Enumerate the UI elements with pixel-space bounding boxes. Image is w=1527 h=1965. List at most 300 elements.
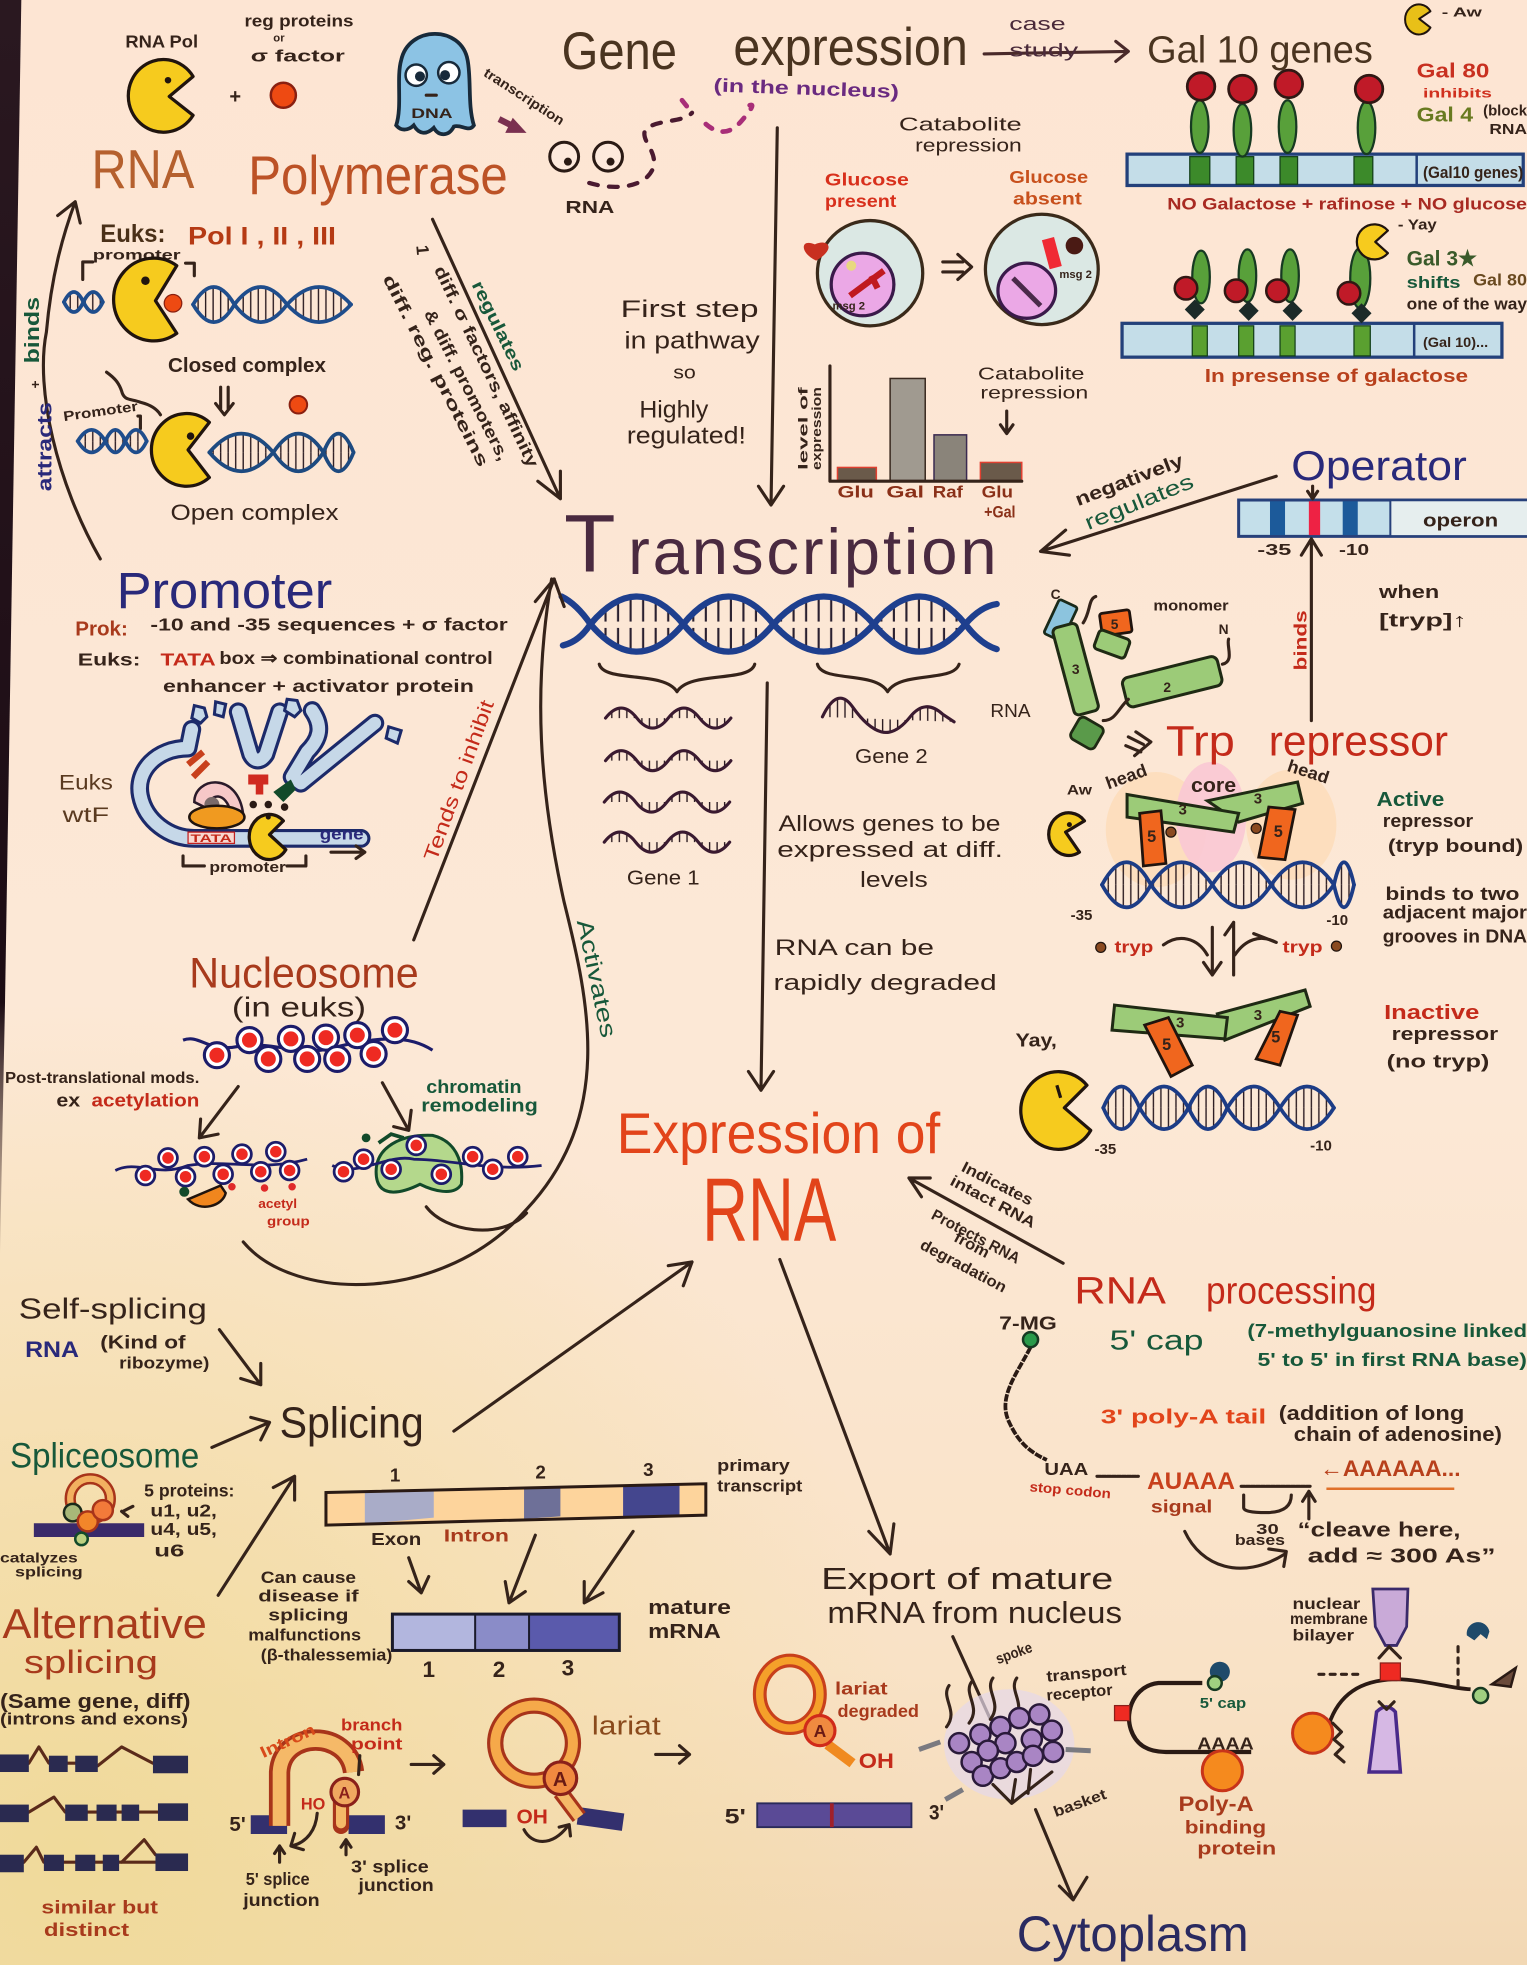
heading: Trp repressor [1166, 718, 1448, 766]
icon: enhancer loop complex [140, 699, 401, 859]
label: nuclear membrane bilayer: nuclear [1293, 1596, 1360, 1613]
bar: gene track [1122, 323, 1502, 357]
diagram: lariat degraded: degraded [837, 1701, 919, 1721]
labels: inactive repressor: (no tryp) [1387, 1051, 1489, 1072]
icon: cell without glucose [985, 214, 1098, 325]
arrow: indicates and protects [909, 1159, 1063, 1296]
diagram: alternative splice forms [0, 1747, 188, 1872]
arrow: negatively regulates: regulates [1081, 469, 1197, 535]
icon: active repressor: 5 [1147, 828, 1156, 846]
label: catabolite repression: repression [915, 135, 1022, 156]
label: Open complex: Open complex [171, 500, 339, 525]
panel: exon and intron splicing [248, 1457, 803, 1682]
label: no galactose condition: NO Galactose + rafinose + NO glucose [1167, 194, 1527, 213]
arrow: small pointer [1308, 486, 1318, 499]
mRNA 3 prime end sequence: UAA [1044, 1459, 1089, 1479]
arrows: splice pointers [275, 1756, 360, 1862]
text: 5 prime cap: 5' to 5' in first RNA base) [1257, 1349, 1527, 1370]
icon: remodeled nucleosomes [332, 1134, 542, 1192]
arrow: nucleosome tends to inhibit [414, 579, 554, 940]
icon: monomer: 5 [1111, 617, 1119, 632]
icon: inactive repressor: 5 [1162, 1036, 1171, 1054]
label: catalyzes splicing [0, 1551, 83, 1580]
icon: happy pacman: - Yay [1398, 216, 1437, 233]
label: RNA: RNA [990, 700, 1031, 721]
diagram: intron branch: A [338, 1784, 350, 1802]
label: same gene: (introns and exons) [0, 1710, 188, 1728]
labels: splice junctions [242, 1856, 434, 1910]
heading: Operator: Operator [1291, 443, 1467, 489]
heading: export of mature mRNA [821, 1563, 1122, 1630]
label: attracts + binds: binds [22, 297, 44, 363]
icon: released sigma [290, 396, 307, 414]
icon: active repressor: 3 [1178, 802, 1187, 819]
label: when tryp up: [tryp]↑ [1379, 610, 1467, 631]
labels: head and core: head [1103, 760, 1150, 793]
icon: monomer: C [1051, 587, 1061, 602]
callout: catabolite repression: Catabolite [978, 364, 1084, 384]
text: prokaryote promoter: -10 and -35 sequences + σ factor [150, 614, 508, 634]
labels: spoke and basket: basket [1051, 1786, 1109, 1821]
label: Euks wtF: wtF [61, 803, 109, 827]
labels: -35 and -10: -10 [1339, 542, 1369, 559]
label: 5 proteins: u4, u5, [150, 1519, 217, 1539]
text: eukaryote promoter: enhancer + activator protein [163, 676, 474, 696]
mRNA 3 prime end sequence: AUAAA [1147, 1468, 1235, 1495]
heading: Gene expression: expression [733, 18, 968, 77]
labels: exon intron [371, 1525, 509, 1549]
heading: Splicing: Splicing [280, 1398, 424, 1447]
label: poly-A binding protein: Poly-A [1178, 1792, 1254, 1816]
label: attracts + binds: attracts [34, 402, 56, 491]
label: reg proteins or sigma factor: σ factor [251, 47, 346, 65]
label: chromatin remodeling: remodeling [421, 1095, 538, 1116]
arrow: indicates and protects: Protects RNA [928, 1207, 1023, 1268]
text: 3 prime poly-A tail [1101, 1403, 1502, 1446]
diagram: lariat: OH [517, 1806, 548, 1828]
heading: Alternative splicing: splicing [24, 1644, 158, 1680]
labels: active repressor: binds to two [1385, 884, 1519, 904]
labels: splice junctions: 5' splice [246, 1869, 310, 1889]
heading: Alternative splicing: Alternative [3, 1601, 207, 1647]
icon: enhancer loop complex: gene [320, 826, 364, 844]
labels: inactive repressor [1384, 1002, 1499, 1072]
bar labels: +Gal [984, 504, 1015, 522]
DNA: closed left [64, 292, 103, 312]
text: first step: Highly [639, 396, 708, 423]
icon: mRNA with receptor: AAAA [1197, 1733, 1254, 1753]
labels: exon intron: Intron [444, 1525, 509, 1545]
bar: gene track: (Gal 10)... [1423, 335, 1488, 350]
label: promoter bracket: promoter [209, 859, 286, 876]
heading: Trp repressor: repressor [1269, 718, 1448, 766]
panel: RNA processing [909, 1159, 1527, 1568]
label: mature mRNA: mRNA [648, 1621, 721, 1643]
label: regulation mechanisms: 1 [412, 244, 433, 256]
label: RNA: RNA [565, 197, 615, 217]
diagram: lariat degraded [760, 1660, 919, 1773]
axis title: level of [795, 386, 810, 470]
label: post translational: ex [56, 1090, 81, 1111]
label: 5 proteins: u1, u2, [150, 1500, 217, 1520]
arrow: self-splicing [219, 1330, 261, 1385]
label: reg proteins or sigma factor: or [273, 32, 285, 44]
icon: acetylated nucleosomes [115, 1142, 307, 1207]
label: mature mRNA [648, 1597, 731, 1643]
labels: active repressor: grooves in DNA [1383, 926, 1527, 946]
text: first step: so [673, 361, 696, 382]
proteins: shifted Gal80 and Gal3 [1175, 248, 1372, 323]
labels: exon intron: Exon [371, 1529, 421, 1549]
label: promoter small: promoter [93, 247, 181, 262]
icon: plus: + [229, 86, 241, 108]
arrow: step [411, 1756, 444, 1773]
DNA: inactive [1103, 1087, 1334, 1129]
heading: RNA Polymerase: RNA [92, 138, 195, 200]
labels: active repressor: adjacent major [1383, 903, 1527, 923]
tryp equilibrium arrows: tryp [1283, 938, 1323, 956]
label: nuclear membrane bilayer: membrane [1290, 1611, 1368, 1628]
RNA copy: gene 2 [822, 698, 954, 732]
DNA: closed right [193, 287, 351, 322]
labels: exon numbers: 3 [643, 1459, 654, 1480]
arrow: splicing to expression [454, 1262, 692, 1431]
label: regulates: regulates [468, 277, 529, 374]
tryp equilibrium arrows [1096, 922, 1341, 975]
mRNA 3 prime end sequence: “cleave here, [1298, 1519, 1461, 1541]
icon: mRNA with receptor: 5' cap [1200, 1695, 1246, 1712]
label: post translational: Post-translational mods. [5, 1070, 199, 1087]
label: can cause disease: disease if [258, 1587, 359, 1606]
labels: intron and branch point: point [351, 1735, 403, 1753]
label: acetyl group: acetyl [258, 1196, 297, 1211]
labels: splice junctions: junction [242, 1890, 320, 1910]
icon: monomer [1044, 587, 1229, 751]
label: catalyzes splicing: splicing [15, 1565, 83, 1580]
heading: Gal 10 genes: Gal 10 genes [1147, 29, 1373, 71]
icon: active repressor: 5 [1274, 823, 1283, 841]
label: when tryp up [1378, 581, 1467, 631]
proteins: Gal4 and Gal80 [1187, 70, 1383, 157]
panel: operator [1041, 443, 1527, 721]
icon: active repressor: 3 [1254, 790, 1262, 807]
label: in the nucleus: (in the nucleus) [713, 74, 899, 102]
arrow: implies [1126, 732, 1151, 756]
arrow: indicates and protects: degradation [917, 1237, 1009, 1296]
text: prokaryote promoter [75, 614, 508, 640]
label: can cause disease: Can cause [261, 1568, 356, 1587]
text: self-splicing RNA: (Kind of [100, 1331, 186, 1352]
labels: Gal80 and Gal4: Gal 4 [1417, 105, 1474, 127]
labels: active repressor: (tryp bound) [1388, 836, 1523, 856]
label: RNA Pol: RNA Pol [125, 32, 198, 52]
text: eukaryote promoter [78, 648, 493, 696]
arrow: case study: case [1009, 13, 1066, 34]
labels: mature numbers: 1 [422, 1657, 435, 1682]
icon: cell without glucose: msg 2 [1059, 269, 1092, 281]
text: gene levels [774, 811, 1003, 995]
icon: DNA ghost: DNA [411, 106, 453, 121]
heading: Trp repressor: Trp [1166, 718, 1235, 766]
icon: DNA ghost [396, 34, 474, 134]
panel: RNA polymerase cast [125, 12, 752, 217]
label: glucose absent [1009, 167, 1088, 208]
mRNA 3 prime end sequence: signal [1151, 1497, 1212, 1517]
label: glucose present: Glucose [825, 169, 909, 189]
heading: Promoter: Promoter [117, 561, 332, 619]
icon: enhancer loop complex: TATA [191, 833, 232, 845]
icon: cell with glucose: msg 2 [832, 301, 865, 313]
bar labels: Gal [886, 484, 924, 502]
DNA: open left [78, 430, 147, 452]
label: glucose absent: absent [1013, 188, 1082, 208]
label: 5 proteins [144, 1480, 234, 1560]
label: Euks Pol I II III: Euks: [100, 220, 165, 248]
labels: head and core [1103, 755, 1332, 797]
heading: Gene expression: Gene [562, 22, 677, 81]
label: Euks Pol I II III: Pol I , II , III [188, 222, 336, 250]
labels: inactive repressor: Inactive [1384, 1002, 1479, 1024]
squiggle and promoter: Promoter [62, 399, 140, 424]
text: first step: First step [621, 296, 758, 323]
arrows: nucleosome branches [199, 1083, 411, 1138]
label: attracts + binds: + [28, 380, 43, 388]
icon: inactive repressor: 5 [1271, 1029, 1280, 1047]
bar: spliced mRNA [725, 1801, 944, 1828]
icon: small pacman Aw: - Aw [1442, 5, 1482, 19]
diagram: intron branch: HO [301, 1796, 325, 1814]
label: Euks wtF: Euks [59, 771, 113, 795]
text: 5 prime cap [1110, 1320, 1527, 1370]
panel: Gal10 no galactose [1127, 4, 1527, 213]
text: eukaryote promoter: TATA [160, 649, 216, 669]
diagram: lariat degraded: OH [859, 1749, 894, 1773]
labels: -35 -10: -10 [1326, 912, 1348, 929]
label: Gene 2: Gene 2 [855, 746, 928, 768]
label: glucose present [825, 169, 909, 211]
label: poly-A binding protein: protein [1197, 1838, 1276, 1859]
icon: mRNA with 7-MG cap [999, 1313, 1057, 1460]
labels: mature numbers: 2 [493, 1657, 505, 1682]
bracket [83, 262, 194, 279]
mRNA 3 prime end sequence: 30 [1256, 1521, 1279, 1538]
labels: -35 -10 [1094, 1137, 1332, 1158]
heading: export of mature mRNA: Export of mature [821, 1563, 1113, 1596]
label: 5 proteins: u6 [154, 1540, 185, 1560]
label: chromatin remodeling: chromatin [426, 1076, 522, 1097]
arrow: ghost to RNA [499, 118, 527, 133]
panel: catabolite repression [795, 113, 1098, 522]
icon: RNA pol pacman [128, 60, 193, 132]
arrow: double [216, 387, 233, 415]
label: regulation mechanisms: & diff. promoters, [420, 306, 513, 464]
bar labels: Glu [837, 484, 874, 502]
arrow: to expression [748, 683, 774, 1090]
panel: Trp repressor [1015, 587, 1527, 1158]
text: gene levels: RNA can be [775, 935, 934, 960]
label: monomer: monomer [1153, 597, 1229, 614]
arrow: case study [984, 13, 1128, 61]
label: in presense of galactose: In presense of galactose [1205, 365, 1468, 386]
arrow: activates: Activates [572, 917, 621, 1040]
panel: nucleosome [5, 950, 542, 1229]
label: mature mRNA: mature [648, 1597, 731, 1619]
labels: active repressor [1377, 789, 1527, 946]
text: 5 prime cap: (7-methylguanosine linked [1247, 1320, 1527, 1341]
label: chromatin remodeling [421, 1076, 538, 1116]
labels: head and core: core [1191, 775, 1236, 797]
labels: Gal80 and Gal4: RNA [1489, 121, 1527, 138]
pointer line [953, 1637, 990, 1719]
labels: -35 and -10 [1257, 542, 1369, 559]
background: head and core highlight [1106, 762, 1336, 887]
icon: inactive repressor: 3 [1254, 1007, 1262, 1024]
arrow: negatively regulates [1041, 449, 1276, 555]
arrow: implies [943, 254, 972, 279]
icon: pacman closed complex [114, 258, 182, 341]
heading: RNA processing [1074, 1269, 1377, 1311]
text: 3 prime poly-A tail: chain of adenosine) [1294, 1424, 1502, 1446]
heading: export of mature mRNA: mRNA from nucleus [827, 1597, 1122, 1630]
diagram: lariat degraded: A [814, 1721, 827, 1741]
icon: monomer: 2 [1163, 680, 1171, 695]
icon: cell with glucose [804, 221, 923, 326]
label: poly-A binding protein [1178, 1792, 1276, 1859]
heading: Expression of RNA: Expression of [617, 1102, 941, 1166]
label: catabolite repression [899, 113, 1022, 156]
bar labels: Raf [933, 484, 963, 502]
labels: exon numbers: 2 [535, 1462, 546, 1483]
text: 5 prime cap: 5' cap [1110, 1325, 1204, 1356]
heading: Transcription [564, 498, 997, 589]
panel: closed and open complex [62, 220, 354, 525]
heading: Expression of RNA: RNA [702, 1160, 837, 1261]
labels: 5 prime and 3 prime ends [229, 1813, 411, 1836]
labels: -35 -10 [1071, 907, 1348, 929]
heading: Nucleosome: Nucleosome [189, 950, 419, 998]
bar chart: level of expression [795, 364, 1088, 522]
label: when tryp up: when [1378, 581, 1439, 602]
heading: Alternative splicing [3, 1601, 207, 1680]
mRNA 3 prime end sequence: bases [1235, 1532, 1285, 1549]
panel: Gal10 with galactose [1122, 216, 1527, 386]
label: similar but distinct [41, 1897, 159, 1940]
mRNA 3 prime end sequence: add ≈ 300 As” [1308, 1546, 1496, 1568]
label: can cause disease: (β-thalessemia) [261, 1645, 392, 1664]
label: transcription: transcription [481, 65, 567, 128]
panel: promoter [59, 561, 508, 876]
RNA copies: gene 1 [604, 708, 731, 852]
icon: small pacman Aw [1405, 4, 1482, 34]
text: 3 prime poly-A tail: (addition of long [1279, 1403, 1464, 1425]
icon: nucleosome beads [183, 1018, 433, 1071]
labels: spoke and basket [993, 1639, 1109, 1821]
heading: RNA processing: RNA [1074, 1269, 1166, 1311]
label: can cause disease: splicing [268, 1605, 349, 1624]
labels: intron and branch point: branch [341, 1717, 402, 1735]
DNA: main helix [562, 597, 997, 652]
heading: Cytoplasm: Cytoplasm [1017, 1906, 1249, 1962]
text: gene levels: rapidly degraded [774, 970, 997, 995]
arrow: step [656, 1746, 690, 1763]
label: similar but distinct: distinct [44, 1919, 130, 1940]
arrow: binds: binds [1290, 610, 1310, 670]
label: primary transcript: transcript [717, 1477, 803, 1495]
icon: happy pacman with Yay: Yay, [1015, 1029, 1057, 1050]
label: attracts + binds [22, 297, 56, 491]
labels: Gal80 and Gal4: Gal 80 [1417, 61, 1489, 83]
arrow: indicates and protects: Indicates [959, 1159, 1036, 1209]
arrow: case study: study [1009, 39, 1079, 60]
arrow: RNA pol regulates transcription [379, 219, 560, 499]
text: self-splicing RNA: Self-splicing [19, 1293, 207, 1325]
arrow: negatively regulates: negatively [1072, 449, 1187, 510]
panel: splice mechanism [229, 1660, 944, 1910]
icon: pacman open complex [151, 414, 209, 486]
icon: mRNA with receptor [1115, 1662, 1254, 1791]
bar: gene track: (Gal10 genes) [1423, 164, 1523, 182]
arrow: expression to export [780, 1259, 894, 1554]
bar: spliced mRNA: 5' [725, 1804, 746, 1828]
labels: Gal3 shift: shifts [1407, 273, 1461, 292]
labels: -35 -10: -35 [1094, 1141, 1116, 1158]
labels: spoke and basket: spoke [993, 1639, 1035, 1668]
arrow: indicates and protects: intact RNA [947, 1173, 1038, 1232]
label: reg proteins or sigma factor: reg proteins [244, 12, 354, 30]
text: eukaryote promoter: box ⇒ combinational control [219, 648, 493, 668]
arrow: alternative splicing [218, 1476, 295, 1595]
bar: spliced mRNA: 3' [929, 1801, 944, 1825]
arrow: binds [1290, 539, 1321, 721]
label: lariat: lariat [592, 1710, 662, 1740]
text: prokaryote promoter: Prok: [75, 618, 128, 640]
text: self-splicing RNA [19, 1293, 209, 1372]
label: primary transcript [717, 1457, 803, 1495]
label: transport receptor [1046, 1662, 1128, 1705]
label: post translational [5, 1070, 199, 1111]
heading: RNA Polymerase: Polymerase [248, 144, 508, 206]
text: self-splicing RNA: ribozyme) [119, 1354, 209, 1372]
text: first step [621, 296, 760, 450]
mRNA 3 prime end sequence: ←AAAAAA... [1320, 1456, 1461, 1481]
bar labels: Glu [982, 484, 1013, 502]
labels: Gal3 shift [1407, 247, 1527, 314]
labels: exon numbers [390, 1459, 654, 1485]
text: self-splicing RNA: RNA [25, 1337, 79, 1362]
label: glucose present: present [825, 191, 897, 211]
icon: spliceosome [34, 1479, 144, 1545]
labels: Gal80 and Gal4: inhibits [1423, 87, 1492, 101]
label: can cause disease: malfunctions [248, 1625, 361, 1644]
icon: inactive repressor: 3 [1176, 1015, 1184, 1032]
DNA: active [1102, 862, 1354, 907]
diagram: lariat: A [553, 1769, 567, 1791]
icon: RNA ghost eyes and dotted body [550, 100, 752, 187]
labels: Gal3 shift: Gal 80 [1473, 271, 1527, 290]
label: regulation mechanisms: diff. σ factors, affinity [430, 263, 543, 471]
label: Euks wtF [59, 771, 113, 827]
icon: monomer: N [1219, 622, 1229, 637]
bars [837, 378, 1022, 481]
label: transport receptor: transport [1046, 1662, 1128, 1686]
panel: export [821, 1563, 1516, 1962]
text: first step: regulated! [627, 423, 746, 450]
icon: nuclear pore complex [919, 1678, 1091, 1803]
label: acetyl group: group [267, 1214, 310, 1229]
callout: catabolite repression: repression [980, 383, 1088, 403]
label: catabolite repression: Catabolite [899, 113, 1022, 134]
label: regulation mechanisms: diff. reg. proteins [379, 271, 493, 470]
